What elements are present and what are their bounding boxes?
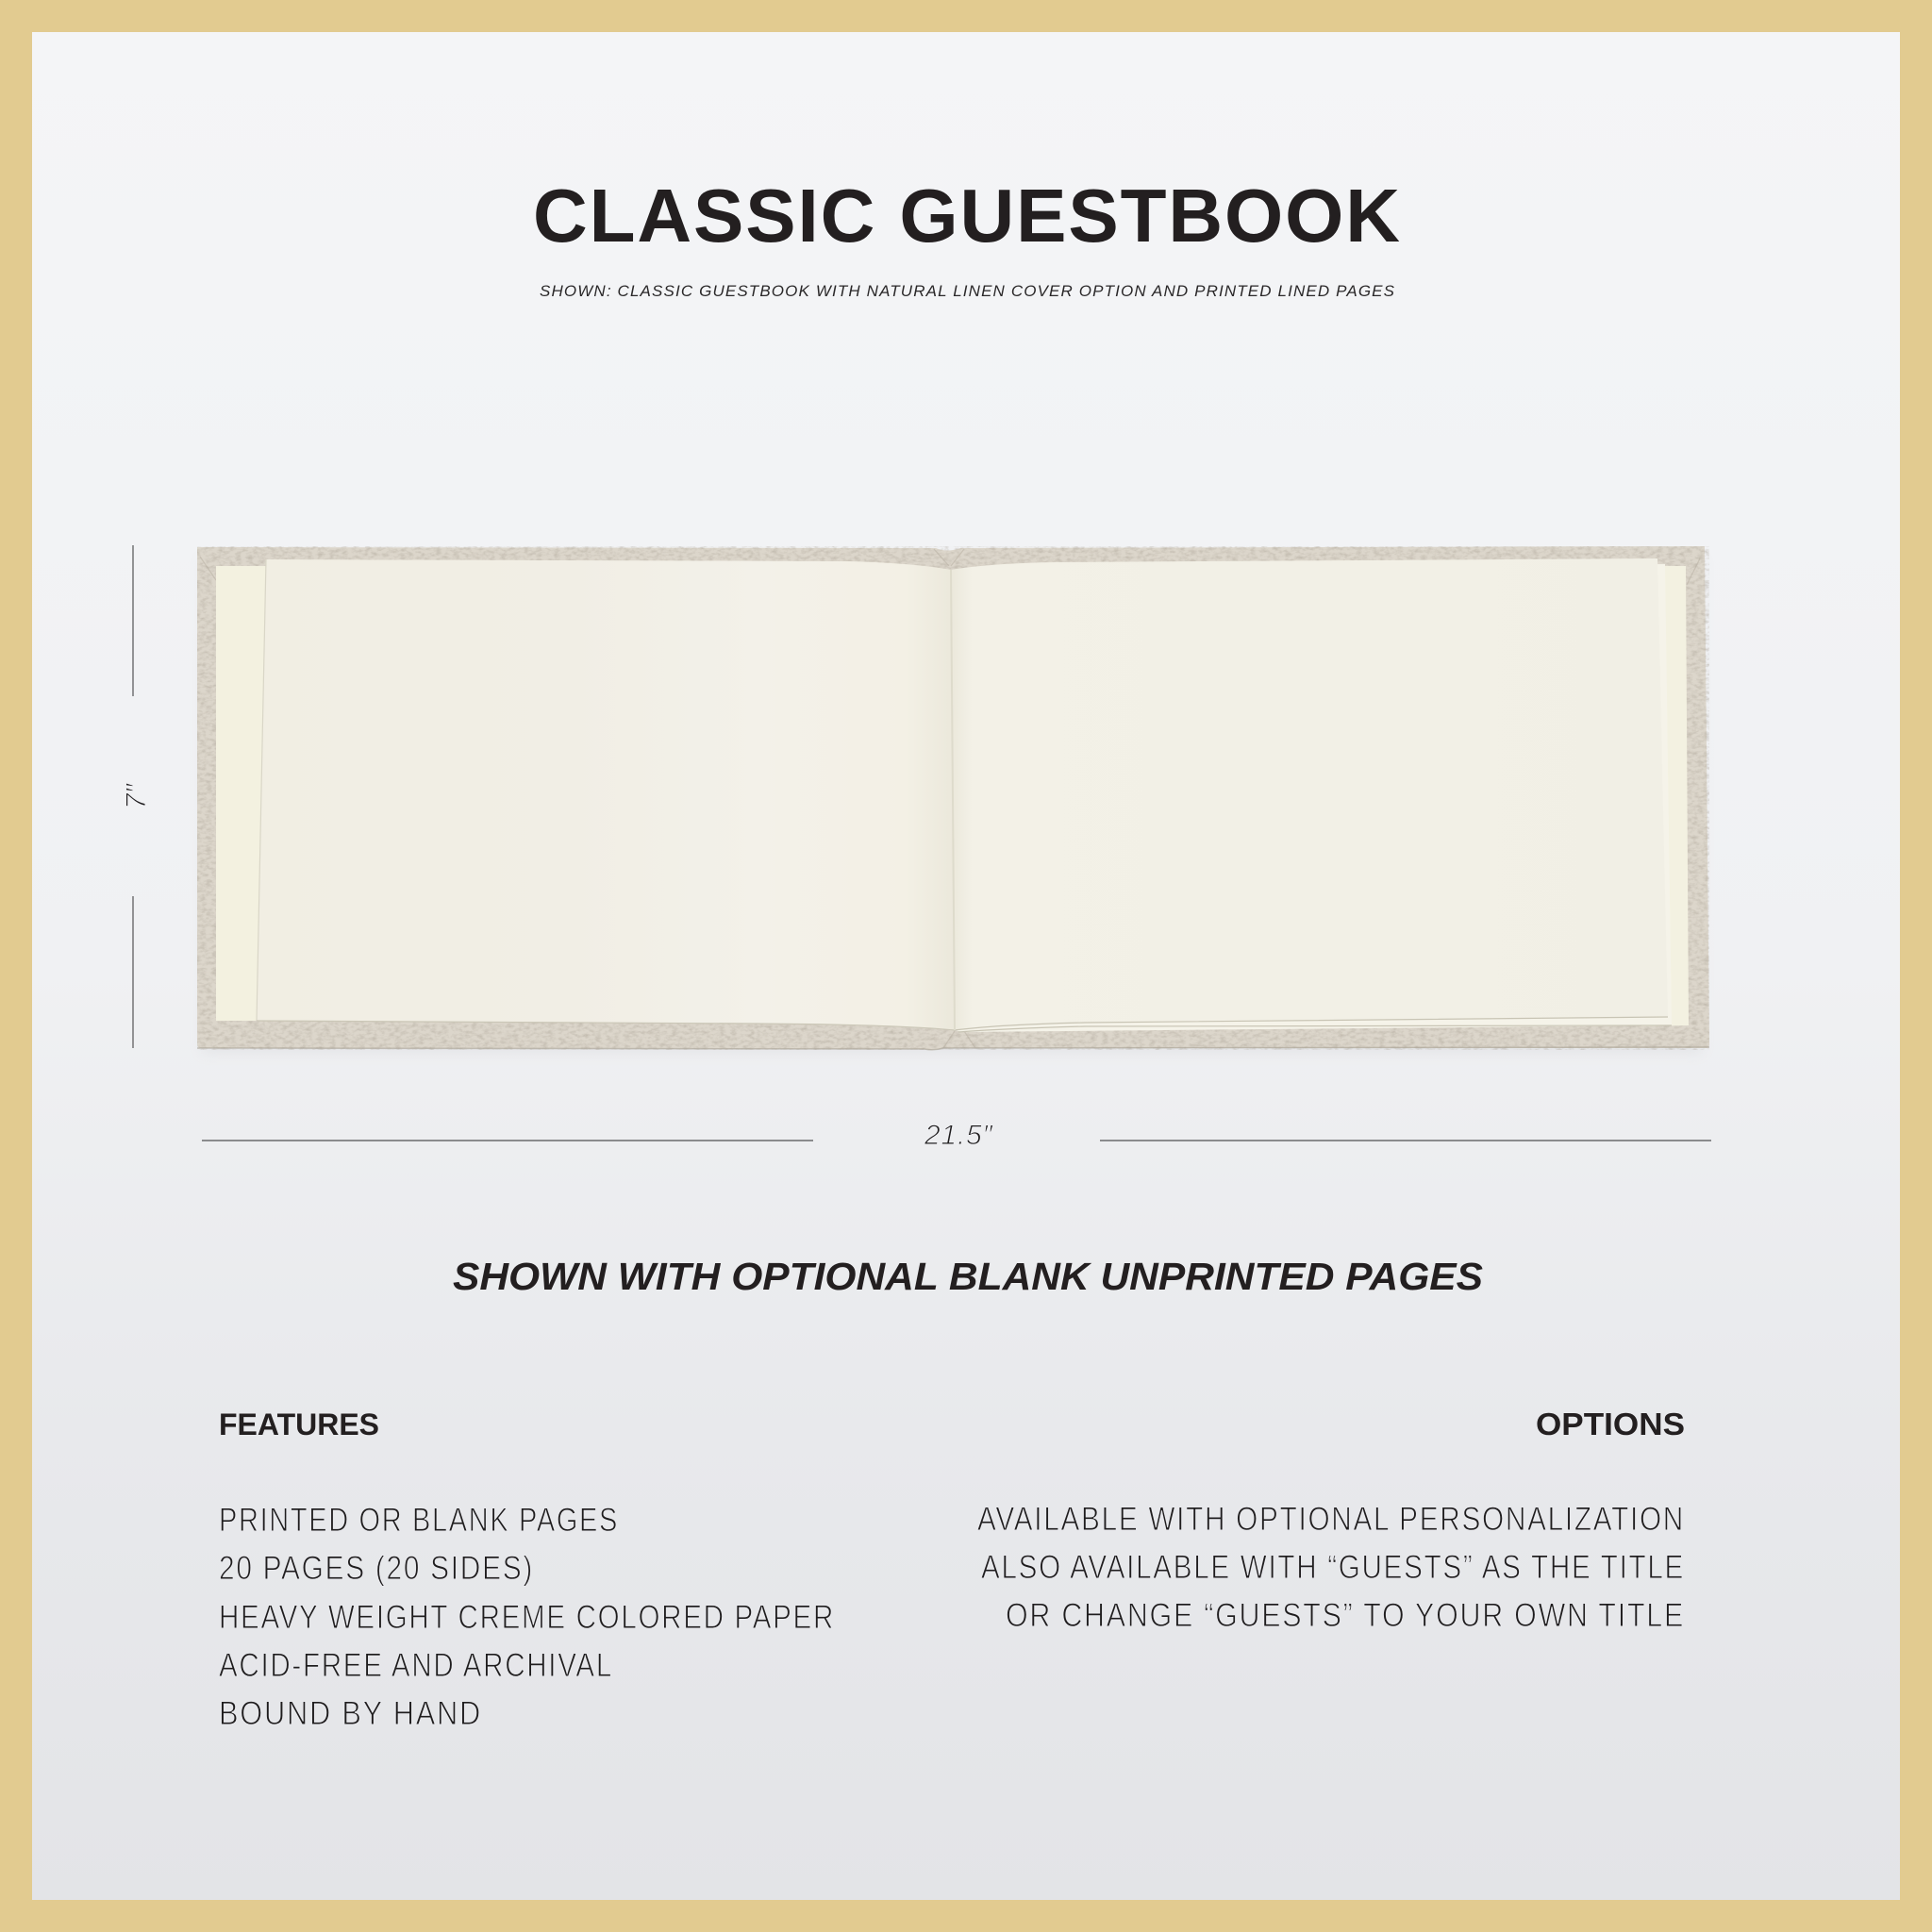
section heading: SHOWN WITH OPTIONAL BLANK UNPRINTED PAGES (453, 1255, 1483, 1298)
book shadow (202, 558, 1702, 1053)
left under page (216, 566, 274, 1021)
width label: 21.5″ (924, 1120, 993, 1151)
options list: ALSO AVAILABLE WITH “GUESTS” AS THE TITLE (981, 1549, 1685, 1586)
options block (977, 1407, 1685, 1634)
options heading: OPTIONS (1536, 1407, 1685, 1441)
features list (219, 1502, 835, 1732)
subtitle: SHOWN: CLASSIC GUESTBOOK WITH NATURAL LINEN COVER OPTION AND PRINTED LINED PAGES (540, 282, 1395, 300)
options list: AVAILABLE WITH OPTIONAL PERSONALIZATION (977, 1501, 1685, 1538)
options list: OR CHANGE “GUESTS” TO YOUR OWN TITLE (1006, 1597, 1685, 1634)
linen cover (197, 546, 1709, 1050)
features list: HEAVY WEIGHT CREME COLORED PAPER (219, 1599, 835, 1636)
height label: 7″ (121, 782, 152, 809)
features list: PRINTED OR BLANK PAGES (219, 1502, 619, 1539)
features heading: FEATURES (219, 1407, 379, 1441)
right under page (1641, 566, 1689, 1026)
options list (977, 1501, 1685, 1634)
right page (951, 558, 1668, 1030)
title: CLASSIC GUESTBOOK (533, 174, 1400, 258)
open book photo (197, 546, 1709, 1053)
right stacked sheet (955, 564, 1672, 1032)
left page (257, 559, 955, 1030)
features list: 20 PAGES (20 SIDES) (219, 1550, 534, 1587)
features list: ACID-FREE AND ARCHIVAL (219, 1647, 613, 1684)
features list: BOUND BY HAND (219, 1695, 482, 1732)
features block (219, 1407, 835, 1732)
book gutter (951, 570, 955, 1030)
